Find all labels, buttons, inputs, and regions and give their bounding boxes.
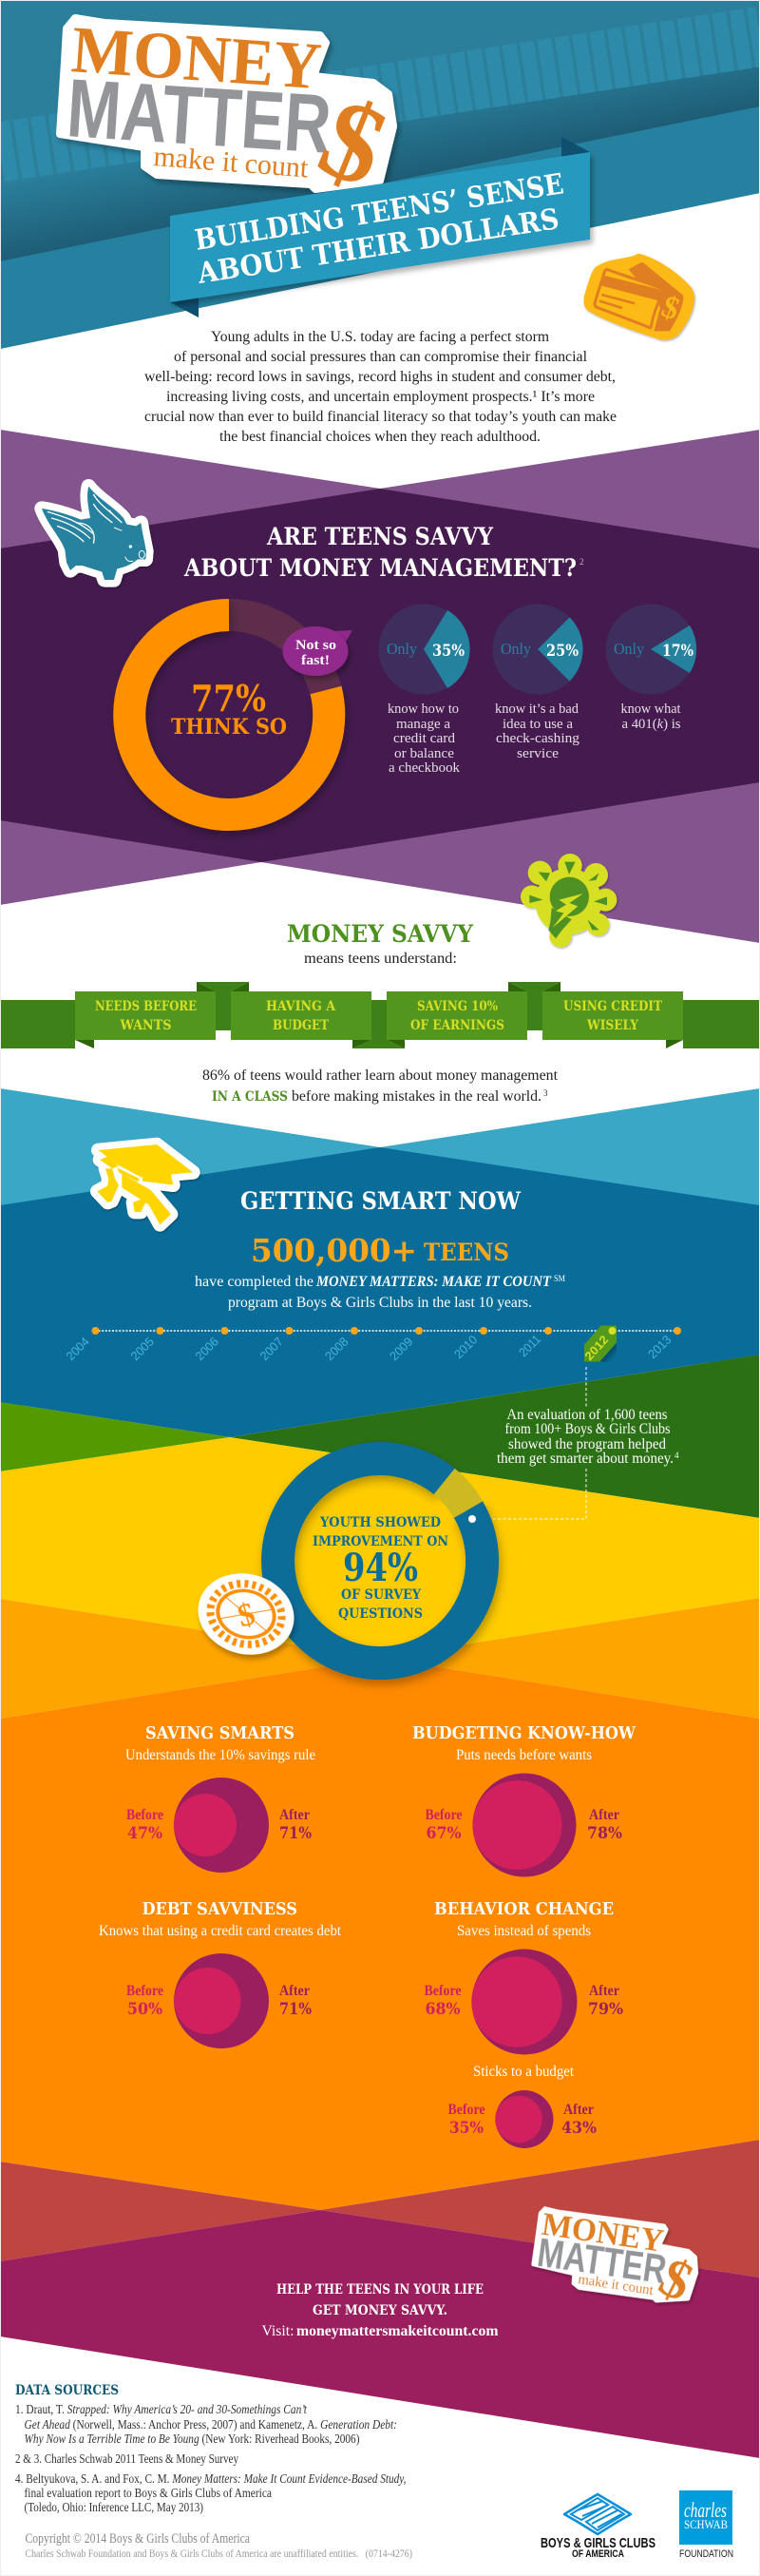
logo: small Money Matters sticker — [530, 2205, 706, 2316]
pie chart: 35%: credit card — [393, 731, 455, 746]
intro text: well-being: record lows in savings, record highs in student and consumer debt, — [144, 369, 616, 385]
callout: not so fast: fast! — [301, 653, 330, 668]
panel: budgeting know-how: Before — [426, 1807, 462, 1823]
heading: are teens savvy — [183, 523, 583, 582]
logo: small Money Matters sticker: make it count — [577, 2272, 655, 2298]
call to action text: HELP THE TEENS IN YOUR LIFE — [276, 2282, 484, 2297]
text: program description: SM — [554, 1274, 565, 1283]
icon: wallet: $ — [657, 289, 684, 327]
panel: saving smarts: After — [279, 1807, 310, 1823]
timeline 2004-2013 — [64, 1327, 681, 1363]
call to action text: moneymattersmakeitcount.com — [296, 2323, 499, 2339]
panel: budgeting know-how: 78% — [587, 1824, 622, 1843]
text: program description: have completed the — [195, 1274, 314, 1290]
purple section background — [0, 430, 760, 943]
panel: saving smarts — [125, 1723, 315, 1873]
timeline 2004-2013: 2008 — [322, 1335, 351, 1363]
highlighted year: 2012: 2012 — [582, 1333, 611, 1363]
stat: 500,000+ teens: TEENS — [424, 1239, 509, 1266]
panel: budgeting know-how: Puts needs before wants — [456, 1747, 592, 1763]
callout: not so fast: Not so — [295, 638, 336, 653]
heading: money savvy: MONEY SAVVY — [287, 920, 474, 948]
intro text: increasing living costs, and uncertain employment prospects.¹ It’s more — [166, 389, 595, 405]
text: evaluation note: them get smarter about money. — [497, 1451, 674, 1467]
copyright: Charles Schwab Foundation and Boys & Girls Clubs of America are unaffiliated entities. (0714-4276) — [25, 2548, 412, 2560]
pie chart: 17% — [606, 605, 696, 732]
heading: are teens savvy: ABOUT MONEY MANAGEMENT? — [183, 554, 577, 582]
panel: behavior change: 79% — [588, 2000, 623, 2019]
panel: debt savviness: After — [279, 1983, 310, 1999]
callout line from 2012 to donut — [472, 1367, 586, 1519]
text: 86% of teens: before making mistakes in the real world. — [292, 1088, 542, 1105]
icon: dollar compass sticker — [189, 1563, 303, 1665]
panel: budgeting know-how — [412, 1723, 636, 1876]
pie chart: 25%: know it’s a bad — [495, 702, 579, 717]
stat: 500,000+ teens — [251, 1232, 509, 1269]
heading: money savvy: means teens understand: — [304, 951, 457, 967]
logo: Charles Schwab Foundation: FOUNDATION — [679, 2548, 733, 2560]
pie chart: 17%: 17% — [662, 642, 694, 661]
panel: behavior change: Saves instead of spends — [457, 1923, 591, 1939]
blue and green section background — [0, 1088, 760, 1518]
logo: Money Matters make it count: make it count — [152, 141, 310, 184]
timeline 2004-2013: 2011 — [516, 1332, 543, 1359]
pie chart: 35%: know how to — [388, 702, 459, 717]
icon: flying piggy bank — [42, 487, 146, 580]
pie chart: 25%: check-cashing — [496, 731, 580, 746]
panel: debt savviness: Before — [126, 1983, 163, 1999]
item: using credit wisely: USING CREDIT — [563, 999, 662, 1014]
heading: getting smart now: GETTING SMART NOW — [240, 1187, 522, 1215]
intro text: crucial now than ever to build financial literacy so that today’s youth can make — [144, 409, 617, 425]
timeline 2004-2013: 2005 — [128, 1335, 157, 1363]
data sources: Get Ahead (Norwell, Mass.: Anchor Press, 2007) and Kamenetz, A. Generation Debt: — [25, 2418, 397, 2432]
intro text — [144, 329, 617, 445]
call to action text: Visit: — [262, 2323, 294, 2339]
timeline 2004-2013: 2010 — [451, 1333, 480, 1361]
logo: Charles Schwab Foundation: charles — [684, 2498, 727, 2522]
logo: Money Matters make it count: $ — [303, 73, 404, 211]
panel: debt savviness — [99, 1899, 342, 2048]
title ribbon: BUILDING TEENS’ SENSE — [193, 167, 566, 258]
call to action text — [262, 2282, 499, 2339]
heading: money savvy — [287, 920, 474, 967]
timeline 2004-2013: 2004 — [64, 1335, 92, 1363]
data sources: 1. Draut, T. Strapped: Why America’s 20- and 30-Somethings Can’t — [15, 2403, 308, 2417]
header background band — [0, 1, 760, 349]
panel: debt savviness: 71% — [279, 2000, 312, 2019]
item: using credit wisely: WISELY — [586, 1018, 639, 1033]
panel: debt savviness: DEBT SAVVINESS — [142, 1899, 297, 1919]
logo: small Money Matters sticker: $ — [650, 2245, 703, 2314]
copyright — [25, 2531, 412, 2560]
intro text: the best financial choices when they reach adulthood. — [219, 429, 541, 445]
heading: are teens savvy: ARE TEENS SAVVY — [266, 523, 494, 550]
text: evaluation note — [497, 1407, 679, 1467]
data sources: 2 & 3. Charles Schwab 2011 Teens & Money Survey — [15, 2452, 238, 2467]
data sources: DATA SOURCES — [15, 2383, 119, 2398]
data sources — [15, 2383, 407, 2515]
highlighted year: 2012 — [582, 1327, 616, 1363]
text: evaluation note: 4 — [674, 1451, 679, 1460]
logo: Money Matters make it count: MONEY — [69, 13, 324, 104]
item: using credit wisely — [542, 991, 683, 1040]
text: program description: program at Boys & Girls Clubs in the last 10 years. — [228, 1295, 532, 1311]
panel: behavior change — [424, 1899, 623, 2148]
stat: 500,000+ teens: 500,000+ — [251, 1232, 417, 1269]
logo: Boys & Girls Clubs of America — [541, 2494, 656, 2560]
panel: budgeting know-how: 67% — [426, 1824, 462, 1843]
donut chart: 94% improvement: QUESTIONS — [338, 1606, 423, 1622]
item: saving 10% of earnings — [387, 991, 527, 1040]
pie chart: 25%: service — [517, 746, 559, 761]
pie chart: 35%: 35% — [432, 642, 465, 661]
timeline 2004-2013: 2006 — [193, 1335, 221, 1363]
pie chart: 17%: a 401(k) is — [621, 717, 681, 732]
icon: graduation cap — [97, 1144, 193, 1224]
pie chart: 25% — [492, 605, 583, 761]
sub-chart: sticks to a budget: Before — [448, 2102, 484, 2118]
item: having a budget: BUDGET — [273, 1018, 329, 1033]
donut chart: 94% improvement: YOUTH SHOWED — [319, 1515, 441, 1530]
panel: budgeting know-how: After — [589, 1807, 619, 1823]
sub-chart: sticks to a budget — [448, 2064, 597, 2148]
timeline 2004-2013: 2007 — [257, 1335, 286, 1363]
text: evaluation note: showed the program helped — [508, 1436, 666, 1452]
copyright: Copyright © 2014 Boys & Girls Clubs of America — [25, 2531, 250, 2547]
item: needs before wants: NEEDS BEFORE — [95, 999, 197, 1014]
logo: Boys & Girls Clubs of America: OF AMERICA — [572, 2548, 624, 2560]
item: having a budget — [231, 991, 371, 1040]
logo: Charles Schwab Foundation: SCHWAB — [684, 2517, 728, 2531]
data sources: Why Now Is a Terrible Time to Be Young (New York: Riverhead Books, 2006) — [25, 2432, 360, 2447]
callout: not so fast — [283, 626, 352, 676]
timeline 2004-2013: 2009 — [387, 1335, 415, 1363]
ribbon: money savvy items — [0, 982, 760, 1048]
text: evaluation note: An evaluation of 1,600 teens — [507, 1407, 667, 1423]
icon: dollar compass sticker: $ — [234, 1596, 258, 1635]
panel: debt savviness: 50% — [127, 2000, 162, 2019]
donut chart: 94% improvement: IMPROVEMENT ON — [313, 1534, 448, 1549]
panel: saving smarts: SAVING SMARTS — [145, 1723, 294, 1743]
logo: Boys & Girls Clubs of America: BOYS & GIRLS CLUBS — [541, 2535, 656, 2551]
intro text: Young adults in the U.S. today are facing a perfect storm — [211, 329, 550, 345]
footer call-to-action background — [0, 2140, 760, 2458]
panel: behavior change: 68% — [426, 2000, 460, 2019]
donut chart: 94% improvement: OF SURVEY — [341, 1587, 422, 1603]
item: needs before wants: WANTS — [120, 1018, 171, 1033]
text: evaluation note: from 100+ Boys & Girls Clubs — [505, 1421, 671, 1437]
call to action text: GET MONEY SAVVY. — [313, 2303, 447, 2318]
donut chart: 94% improvement — [278, 1459, 483, 1663]
logo: small Money Matters sticker: MATTER — [535, 2230, 669, 2293]
pie chart: 35%: Only — [387, 640, 417, 658]
pie chart: 25%: idea to use a — [503, 717, 573, 732]
donut chart: 94% improvement: 94% — [343, 1546, 418, 1590]
donut chart: 77% think so: 77% — [191, 677, 266, 720]
icon: light bulb — [521, 854, 617, 948]
pie chart: 25%: Only — [501, 640, 531, 658]
intro text: of personal and social pressures than can compromise their financial — [174, 349, 588, 365]
logo: Money Matters make it count: MATTER — [65, 62, 333, 171]
text: 86% of teens: 3 — [543, 1088, 548, 1098]
sub-chart: sticks to a budget: Sticks to a budget — [473, 2064, 575, 2080]
text: program description — [195, 1274, 565, 1311]
data sources: final evaluation report to Boys & Girls Clubs of America — [25, 2487, 273, 2501]
donut chart: 77% think so — [129, 615, 329, 815]
title ribbon — [170, 137, 590, 317]
text: 86% of teens: 86% of teens would rather learn about money management — [202, 1067, 559, 1084]
heading: are teens savvy: 2 — [580, 557, 583, 567]
panel: behavior change: BEHAVIOR CHANGE — [434, 1899, 614, 1919]
pie chart: 35%: manage a — [396, 717, 450, 732]
panel: saving smarts: Before — [126, 1807, 163, 1823]
data sources: (Toledo, Ohio: Inference LLC, May 2013) — [25, 2501, 203, 2515]
donut chart: 77% think so: THINK SO — [171, 715, 287, 740]
logo: small Money Matters sticker: MONEY — [540, 2206, 666, 2259]
item: saving 10% of earnings: OF EARNINGS — [410, 1018, 504, 1033]
panel: debt savviness: Knows that using a credit card creates debt — [99, 1923, 342, 1939]
pie chart: 17%: Only — [614, 640, 644, 658]
logo: Charles Schwab Foundation — [679, 2490, 733, 2560]
item: needs before wants — [75, 991, 216, 1040]
logo: Money Matters make it count — [60, 13, 404, 211]
panel: behavior change: Before — [424, 1983, 462, 1999]
panel: budgeting know-how: BUDGETING KNOW-HOW — [412, 1723, 636, 1743]
text: program description: MONEY MATTERS: MAKE IT COUNT — [315, 1274, 552, 1290]
data sources: 4. Beltyukova, S. A. and Fox, C. M. Money Matters: Make It Count Evidence-Based Study, — [15, 2472, 407, 2487]
pie chart: 35%: a checkbook — [389, 760, 460, 776]
timeline 2004-2013: 2013 — [645, 1333, 674, 1361]
item: having a budget: HAVING A — [266, 999, 336, 1014]
icon: wallet — [583, 254, 694, 340]
pie chart: 25%: 25% — [546, 642, 579, 661]
panel: saving smarts: 71% — [279, 1824, 312, 1843]
pie chart: 35% — [378, 605, 470, 776]
yellow and orange section background — [0, 1437, 760, 2210]
panel: saving smarts: 47% — [127, 1824, 162, 1843]
pie chart: 35%: or balance — [394, 746, 454, 761]
title ribbon: ABOUT THEIR DOLLARS — [195, 202, 561, 291]
pie chart: 17%: know what — [621, 702, 681, 717]
sub-chart: sticks to a budget: 35% — [449, 2119, 484, 2138]
sub-chart: sticks to a budget: After — [563, 2102, 594, 2118]
panel: behavior change: After — [589, 1983, 619, 1999]
panel: saving smarts: Understands the 10% savings rule — [125, 1747, 315, 1763]
text: 86% of teens — [202, 1067, 559, 1105]
sub-chart: sticks to a budget: 43% — [561, 2119, 597, 2138]
text: 86% of teens: IN A CLASS — [212, 1089, 288, 1105]
item: saving 10% of earnings: SAVING 10% — [417, 999, 498, 1014]
